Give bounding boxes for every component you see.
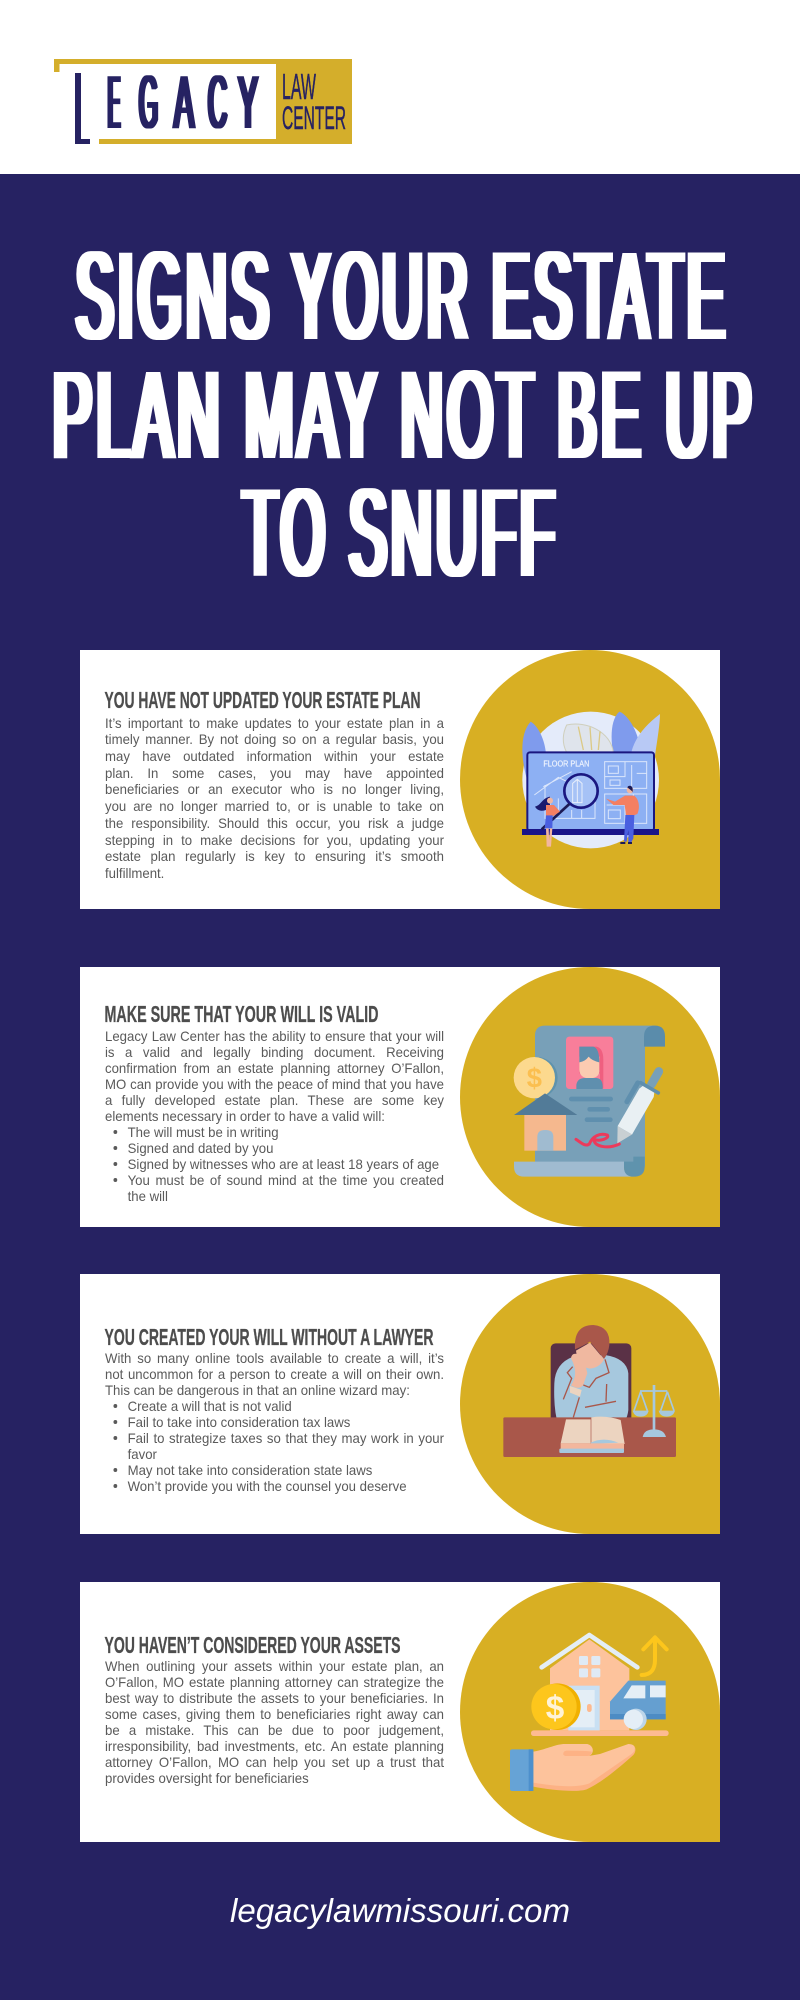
body text bbox=[104, 1350, 444, 1494]
body text: the will bbox=[127, 1188, 167, 1204]
body text: Signed and dated by you bbox=[127, 1140, 273, 1156]
body text bbox=[104, 1028, 444, 1204]
body text: irresponsibility, bad investments, etc. An estate planning bbox=[104, 1738, 444, 1754]
icon: floor plan laptop bbox=[522, 712, 660, 848]
body text: some cases, giving them to beneficiaries right away can bbox=[104, 1706, 444, 1722]
gold drop shape bbox=[460, 650, 720, 909]
body text: Fail to strategize taxes so that they may work in your bbox=[127, 1430, 444, 1446]
body text: timely manner. By not doing so on a regular basis, you bbox=[104, 731, 444, 747]
logo: Y bbox=[238, 60, 258, 144]
body text: the responsibility. Should this occur, you risk a judge bbox=[104, 815, 444, 831]
body text: The will must be in writing bbox=[127, 1124, 278, 1140]
body text: estate plan regularly is key to ensuring it’s smooth bbox=[104, 848, 444, 864]
body text: Signed by witnesses who are at least 18 years of age bbox=[127, 1156, 439, 1172]
icon: person at desk with scales bbox=[503, 1325, 676, 1457]
icon: will document: $ bbox=[527, 1062, 542, 1093]
body text: not uncommon for a person to create a will on their own. bbox=[104, 1366, 444, 1382]
body text: beneficiaries or an executor who is no longer living, bbox=[104, 781, 444, 797]
gold drop shape bbox=[460, 967, 720, 1227]
icon: floor plan laptop: FLOOR PLAN bbox=[543, 760, 590, 769]
panel: you have not updated your estate plan bbox=[80, 650, 720, 909]
body text bbox=[104, 715, 444, 881]
logo: C bbox=[208, 60, 227, 144]
logo bbox=[54, 59, 352, 144]
panel: you created your will without a lawyer bbox=[80, 1274, 720, 1534]
body text: Legacy Law Center has the ability to ensure that your will bbox=[104, 1028, 444, 1044]
body text: Fail to take into consideration tax laws bbox=[127, 1414, 350, 1430]
body text: Won’t provide you with the counsel you deserve bbox=[127, 1478, 406, 1494]
body text: elements necessary in order to have a valid will: bbox=[104, 1108, 384, 1124]
body text: With so many online tools available to create a will, it’s bbox=[104, 1350, 444, 1366]
logo: G bbox=[139, 60, 158, 144]
body text: fulfillment. bbox=[104, 865, 164, 881]
icon: hand holding house, car and coin bbox=[510, 1632, 669, 1791]
gold drop shape bbox=[460, 1582, 720, 1842]
body text: a fully developed estate plan. These are some key bbox=[104, 1092, 444, 1108]
icon: hand holding house, car and coin: $ bbox=[546, 1690, 565, 1727]
body text: May not take into consideration state laws bbox=[127, 1462, 372, 1478]
body text: is a valid and legally binding document. Receiving bbox=[104, 1044, 444, 1060]
body text: It’s important to make updates to your estate plan in a bbox=[104, 715, 444, 731]
body text: attorney O’Fallon, MO can help you set up a trust that bbox=[104, 1754, 444, 1770]
body text: you are no longer married to, or is unable to take on bbox=[104, 798, 444, 814]
body text: stepping in to make decisions for you, updating your bbox=[104, 832, 444, 848]
body text: confirmation from an estate planning attorney O’Fallon, bbox=[104, 1060, 444, 1076]
body text: best way to distribute the assets to your beneficiaries. In bbox=[104, 1690, 444, 1706]
gold drop shape bbox=[460, 1274, 720, 1534]
body text: Create a will that is not valid bbox=[127, 1398, 291, 1414]
title bbox=[53, 235, 756, 585]
panel: make sure that your will is valid bbox=[80, 967, 720, 1227]
body text bbox=[104, 1658, 444, 1786]
body text: When outlining your assets within your estate plan, an bbox=[104, 1658, 444, 1674]
body text: MO can provide you with the peace of mind that you have bbox=[104, 1076, 444, 1092]
body text: provides oversight for beneficiaries bbox=[104, 1770, 308, 1786]
body text: favor bbox=[127, 1446, 156, 1462]
body text: be a mistake. This can be due to poor judgement, bbox=[104, 1722, 444, 1738]
footer website url: legacylawmissouri.com bbox=[230, 1892, 570, 1929]
header band bbox=[0, 0, 800, 174]
body text: O’Fallon, MO estate planning attorney can strategize the bbox=[104, 1674, 444, 1690]
icon: will document bbox=[514, 1026, 665, 1177]
body text: You must be of sound mind at the time you created bbox=[127, 1172, 444, 1188]
body text: This can be dangerous in that an online wizard may: bbox=[104, 1382, 409, 1398]
logo: E bbox=[108, 60, 120, 144]
body text: plan. In some cases, you may have appointed bbox=[104, 765, 444, 781]
body text: may have outdated information within your estate bbox=[104, 748, 444, 764]
panel: you haven't considered your assets bbox=[80, 1582, 720, 1842]
logo: A bbox=[174, 60, 194, 144]
